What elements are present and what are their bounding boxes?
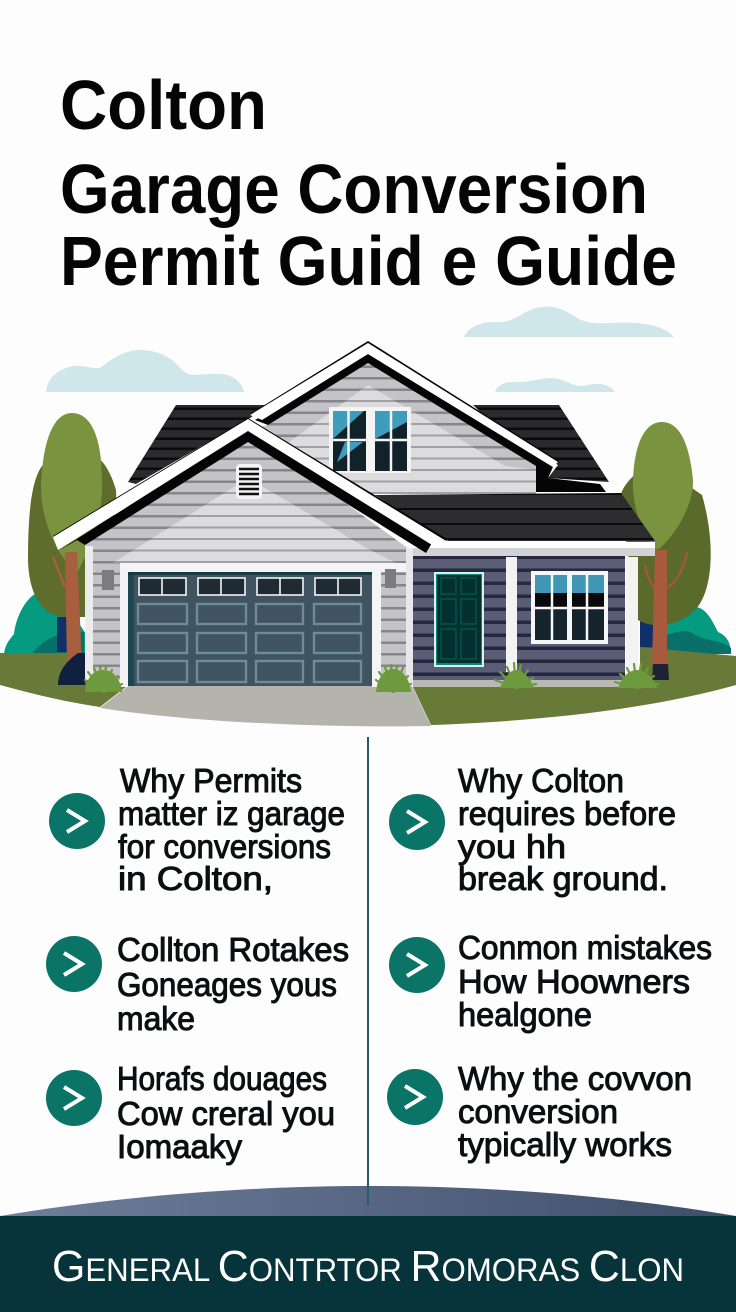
item: common mistakes: Conmon mistakes [458, 929, 712, 966]
item: common mistakes: How Hoowners [458, 963, 690, 1000]
garage door [128, 572, 372, 686]
item: why the conversion works: typically works [458, 1126, 672, 1163]
footer dome [0, 1186, 736, 1216]
illustration: house scene [0, 341, 736, 726]
item: why colton requires [389, 762, 676, 897]
footer band [0, 1216, 736, 1312]
porch window [531, 571, 608, 644]
garage wall [85, 432, 413, 687]
item: colton rotakes: Goneages yous [117, 966, 337, 1003]
icon: chevron badge [46, 936, 102, 992]
driveway [100, 686, 431, 726]
upper gable trim [250, 341, 559, 467]
item: why colton requires: break ground. [458, 860, 668, 897]
main gable trim [53, 418, 447, 553]
item: colton rotakes: make [117, 1000, 195, 1037]
item: why colton requires: you hh [458, 828, 566, 865]
item: why permits matter: for conversions [118, 828, 331, 865]
item: why permits matter: matter iz garage [118, 795, 345, 832]
porch wall [413, 556, 625, 680]
front door [434, 572, 484, 667]
item: why permits matter: Why Permits [120, 762, 302, 799]
porch fascia [413, 548, 655, 556]
item: horafs douages [46, 1060, 335, 1165]
icon: chevron badge [46, 1070, 102, 1126]
item: why colton requires: requires before [458, 795, 676, 832]
title: Garage Conversion [60, 150, 648, 228]
title [60, 66, 677, 300]
upper storey [248, 362, 536, 494]
porch floor [413, 680, 638, 687]
back roofs [128, 405, 268, 484]
item: why colton requires: Why Colton [458, 762, 624, 799]
clouds [46, 307, 674, 392]
icon: chevron badge [389, 937, 445, 993]
title: Permit Guid e Guide [60, 222, 677, 300]
item: horafs douages: Horafs douages [117, 1060, 327, 1097]
title: Colton [60, 66, 267, 144]
item: horafs douages: Iomaaky [117, 1128, 242, 1165]
item: why the conversion works: Why the covvon [458, 1060, 692, 1097]
footer text: GENERAL CONTRTOR ROMORAS CLON [52, 1242, 684, 1291]
gable vent [236, 464, 262, 499]
item: colton rotakes: Collton Rotakes [117, 931, 349, 968]
bushes [85, 663, 658, 692]
left tree [28, 413, 116, 685]
item: common mistakes [389, 929, 712, 1033]
upper windows [329, 407, 411, 473]
item: colton rotakes [46, 931, 349, 1037]
center divider [367, 737, 369, 1207]
icon: chevron badge [49, 793, 105, 849]
icon: chevron badge [387, 1069, 443, 1125]
lawn [0, 647, 736, 725]
item: why permits matter [49, 762, 345, 897]
item: why permits matter: in Colton, [118, 860, 273, 897]
lower front roof [375, 493, 655, 541]
right tree [620, 422, 711, 680]
shrubs [4, 593, 731, 654]
item: common mistakes: healgone [458, 996, 592, 1033]
item: why the conversion works: conversion [458, 1093, 618, 1130]
icon: chevron badge [389, 794, 445, 850]
item: horafs douages: Cow creral you [117, 1095, 335, 1132]
wall lamps [102, 569, 396, 590]
divider overlap on dome [367, 1186, 369, 1206]
columns [506, 557, 638, 672]
item: why the conversion works [387, 1060, 692, 1163]
